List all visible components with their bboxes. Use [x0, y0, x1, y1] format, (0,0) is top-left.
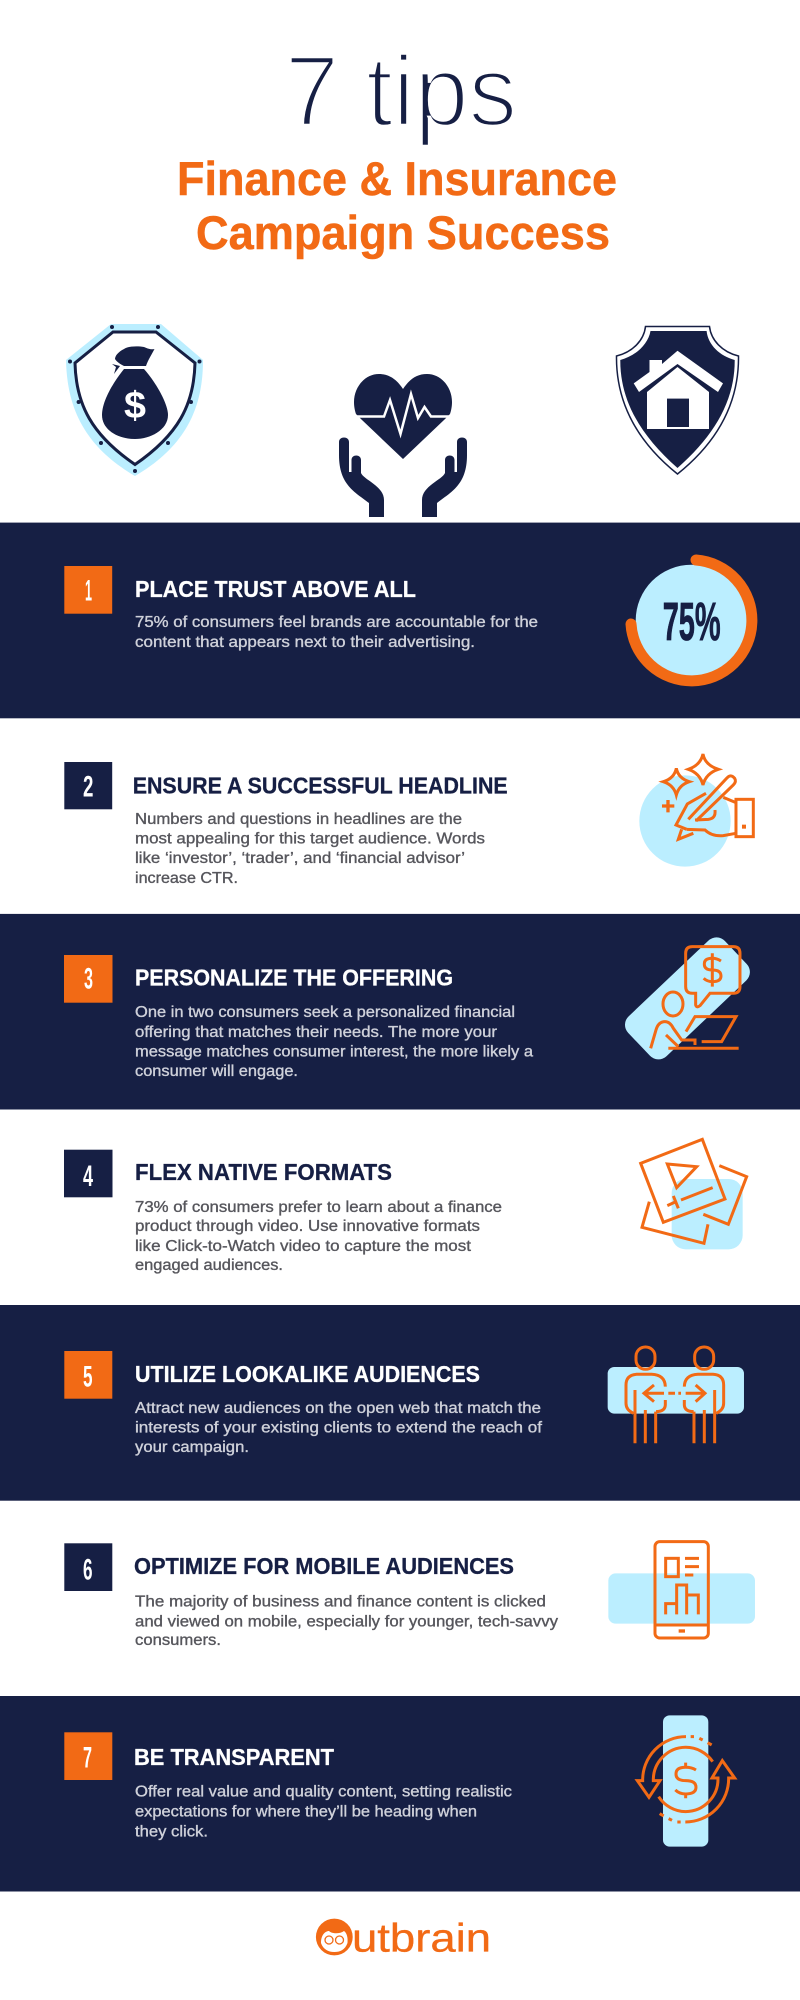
number badge 7 — [64, 1732, 112, 1780]
body 5: interests of your existing clients to extend the reach of — [135, 1420, 543, 1437]
heading 7: BE TRANSPARENT — [134, 1744, 334, 1770]
body 3: One in two consumers seek a personalized financial — [135, 1004, 515, 1021]
number badge 6: 6 — [83, 1553, 92, 1586]
heading 1: PLACE TRUST ABOVE ALL — [135, 576, 416, 602]
body 7 — [135, 1783, 512, 1840]
chart: 75% ring — [631, 560, 752, 681]
body 7: Offer real value and quality content, setting realistic — [135, 1783, 512, 1800]
icon: two people exchanging arrows — [608, 1347, 744, 1443]
number badge 4: 4 — [83, 1160, 93, 1193]
number badge 2 — [64, 762, 112, 809]
icon: person at laptop with dollar bubble — [620, 933, 755, 1064]
body 3: offering that matches their needs. The more your — [135, 1024, 497, 1041]
number badge 6 — [64, 1543, 112, 1591]
subtitle: Finance & Insurance Campaign Success — [177, 152, 617, 259]
number badge 1 — [64, 566, 112, 614]
icon: heart in hands — [339, 374, 467, 517]
number badge 4 — [64, 1150, 112, 1197]
number badge 5 — [64, 1351, 112, 1399]
number badge 1: 1 — [85, 575, 92, 608]
panel: tip 2 — [64, 754, 753, 887]
body 6: and viewed on mobile, especially for younger, tech-savvy — [135, 1614, 558, 1631]
body 1: content that appears next to their advertising. — [135, 634, 475, 651]
body 6: consumers. — [135, 1632, 221, 1649]
body 4: engaged audiences. — [135, 1257, 283, 1274]
icon: hand writing with sparkles — [639, 754, 753, 867]
icon: house shield — [616, 326, 739, 474]
body 2: Numbers and questions in headlines are the — [135, 811, 462, 828]
heading 2: ENSURE A SUCCESSFUL HEADLINE — [133, 772, 508, 798]
chart: 75% ring: 75% — [663, 592, 721, 652]
heading 5: UTILIZE LOOKALIKE AUDIENCES — [135, 1361, 480, 1387]
body 5: Attract new audiences on the open web that match the — [135, 1400, 541, 1417]
icon: circular dollar arrows — [637, 1715, 735, 1847]
panel: tip 7 — [0, 1696, 800, 1892]
body 6 — [135, 1594, 558, 1649]
number badge 3: 3 — [84, 962, 93, 995]
body 4: product through video. Use innovative formats — [135, 1218, 480, 1235]
body 4: like Click-to-Watch video to capture the most — [135, 1238, 472, 1255]
number badge 3 — [64, 955, 112, 1003]
panel: tip 3 — [0, 914, 800, 1110]
subtitle: Finance & Insurance Campaign Success: Campaign Success — [196, 206, 610, 259]
logo: Outbrain: utbrain — [352, 1916, 491, 1960]
body 1 — [135, 614, 538, 651]
body 2 — [135, 811, 485, 887]
logo: Outbrain — [316, 1916, 491, 1960]
body 5 — [135, 1400, 543, 1456]
heading 6: OPTIMIZE FOR MOBILE AUDIENCES — [134, 1553, 514, 1579]
icon: money bag shield: $ — [124, 385, 146, 427]
body 7: they click. — [135, 1823, 208, 1840]
heading 3: PERSONALIZE THE OFFERING — [135, 965, 453, 991]
body 4 — [135, 1199, 502, 1274]
body 3 — [135, 1004, 533, 1080]
body 2: like ‘investor’, ‘trader’, and ‘financial advisor’ — [135, 850, 465, 867]
body 7: expectations for where they’ll be heading when — [135, 1803, 477, 1820]
number badge 7: 7 — [83, 1741, 92, 1774]
body 5: your campaign. — [135, 1439, 249, 1456]
body 3: consumer will engage. — [135, 1063, 298, 1080]
number badge 2: 2 — [83, 771, 93, 804]
subtitle: Finance & Insurance Campaign Success: Finance & Insurance — [177, 152, 617, 205]
panel: tip 4 — [64, 1139, 747, 1274]
icon: money bag shield — [66, 324, 203, 476]
body 1: 75% of consumers feel brands are accountable for the — [135, 614, 538, 631]
body 6: The majority of business and finance content is clicked — [135, 1594, 546, 1611]
panel: tip 5 — [0, 1305, 800, 1501]
panel: tip 1 — [0, 523, 800, 718]
body 3: message matches consumer interest, the more likely a — [135, 1044, 533, 1061]
panel: tip 6 — [64, 1542, 755, 1649]
icon: mobile phone with chart — [608, 1542, 755, 1638]
heading 4: FLEX NATIVE FORMATS — [135, 1159, 392, 1185]
title: 7 tips: 7 tips — [285, 36, 517, 148]
icon: overlapping video papers — [641, 1139, 747, 1249]
number badge 5: 5 — [83, 1361, 92, 1394]
body 2: most appealing for this target audience. Words — [135, 830, 485, 848]
body 2: increase CTR. — [135, 870, 238, 887]
body 4: 73% of consumers prefer to learn about a finance — [135, 1199, 502, 1216]
